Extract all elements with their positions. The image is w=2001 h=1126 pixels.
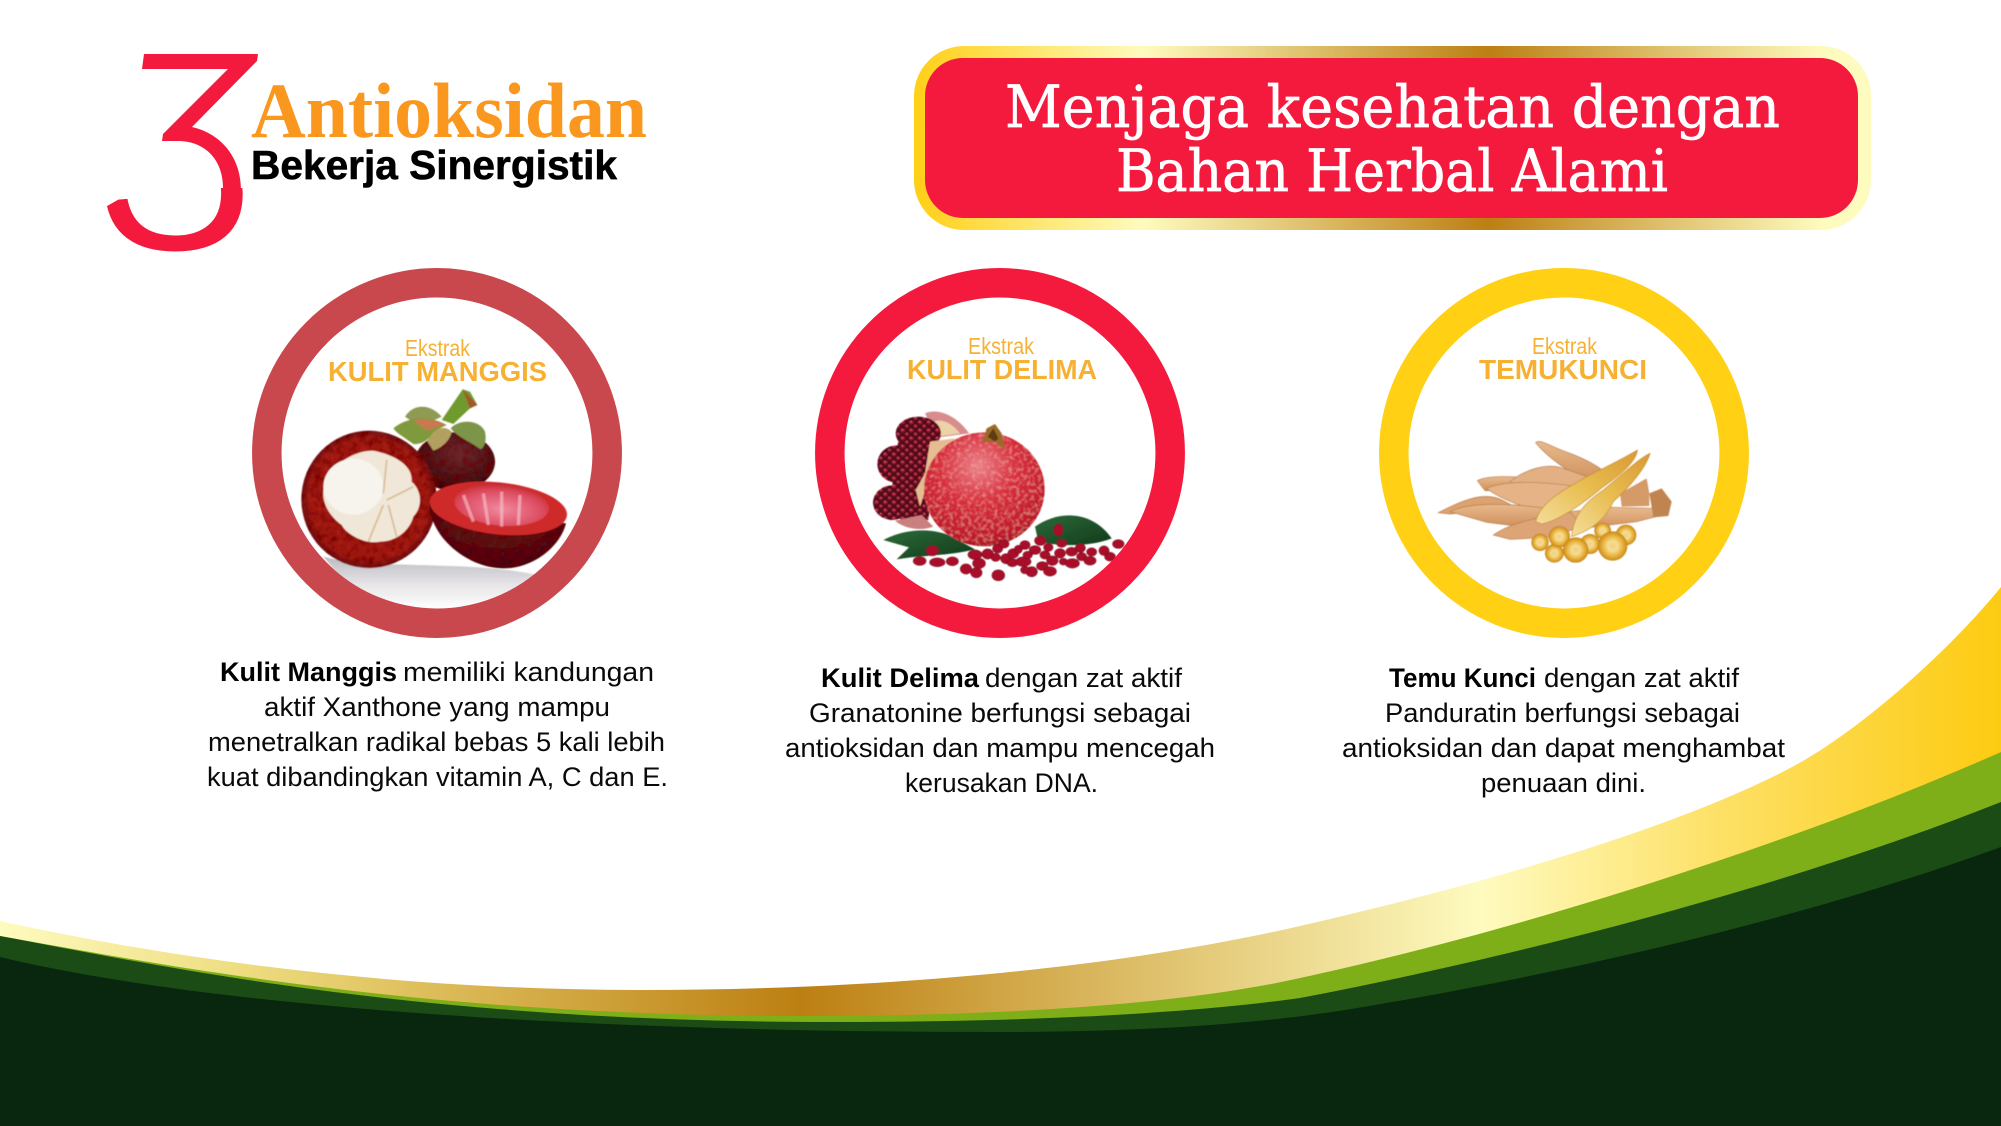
- label: ekstrak temukunci: [1479, 333, 1647, 385]
- text: temu kunci description: penuaan dini.: [1481, 768, 1646, 798]
- label: ekstrak temukunci: TEMUKUNCI: [1479, 354, 1647, 385]
- text: kulit delima description: Granatonine berfungsi sebagai: [809, 698, 1191, 728]
- text: kulit manggis description: memiliki kandungan: [403, 657, 654, 687]
- text: kulit manggis description: Kulit Manggis: [220, 657, 397, 687]
- banner: Menjaga kesehatan: [914, 46, 1871, 230]
- panel: kulit manggis: [207, 283, 668, 792]
- title: Antioksidan: Antioksidan: [251, 67, 647, 154]
- text: temu kunci description: dengan zat aktif: [1544, 663, 1740, 693]
- text: kulit manggis description: [207, 657, 668, 792]
- text: temu kunci description: Panduratin berfungsi sebagai: [1385, 698, 1740, 728]
- banner: Menjaga kesehatan: Menjaga kesehatan dengan: [1005, 73, 1780, 141]
- banner: Menjaga kesehatan: Bahan Herbal Alami: [1116, 137, 1668, 205]
- ring: temukunci: [1394, 283, 1734, 623]
- illustration: pomegranate: [873, 412, 1124, 581]
- text: kulit delima description: Kulit Delima: [821, 663, 980, 693]
- text: temu kunci description: Temu Kunci: [1389, 663, 1536, 693]
- illustration: mangosteen: [301, 389, 570, 608]
- big numeral 3: [104, 54, 258, 252]
- subtitle: Bekerja Sinergistik: Bekerja Sinergistik: [251, 142, 617, 188]
- label: ekstrak kulit delima: KULIT DELIMA: [907, 354, 1097, 385]
- text: kulit delima description: kerusakan DNA.: [905, 768, 1098, 798]
- ring: kulit delima: [830, 283, 1170, 623]
- text: kulit manggis description: aktif Xanthone yang mampu: [264, 692, 610, 722]
- text: kulit delima description: dengan zat aktif: [985, 663, 1183, 693]
- label: ekstrak kulit manggis: [328, 335, 547, 387]
- label: ekstrak kulit delima: [907, 333, 1097, 385]
- text: kulit manggis description: menetralkan radikal bebas 5 kali lebih: [208, 727, 665, 757]
- text: kulit delima description: [785, 663, 1215, 798]
- text: kulit delima description: antioksidan dan mampu mencegah: [785, 733, 1215, 763]
- text: kulit manggis description: kuat dibandingkan vitamin A, C dan E.: [207, 762, 668, 792]
- ring: kulit manggis: [267, 283, 607, 623]
- text: temu kunci description: [1342, 663, 1786, 798]
- background wave: [0, 587, 2001, 1126]
- illustration: temukunci rhizomes: [1438, 441, 1672, 562]
- label: ekstrak kulit delima: Ekstrak: [968, 333, 1034, 359]
- label: ekstrak temukunci: Ekstrak: [1532, 333, 1597, 359]
- text: temu kunci description: antioksidan dan dapat menghambat: [1342, 733, 1786, 763]
- label: ekstrak kulit manggis: Ekstrak: [405, 335, 470, 361]
- label: ekstrak kulit manggis: KULIT MANGGIS: [328, 356, 547, 387]
- panel: temukunci: [1342, 283, 1786, 798]
- panel: kulit delima: [785, 283, 1215, 798]
